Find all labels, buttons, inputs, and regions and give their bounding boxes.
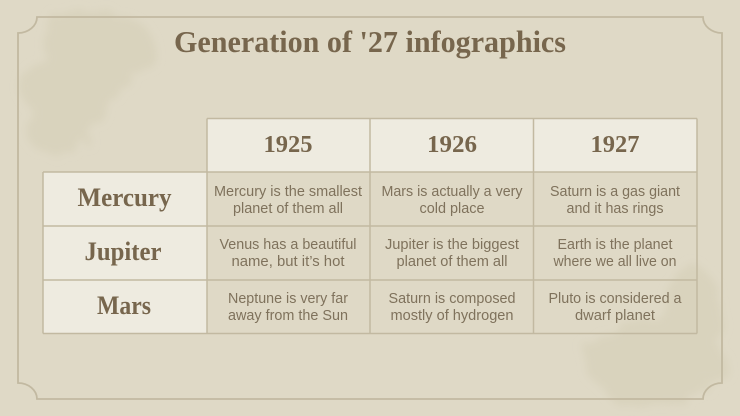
header row background [207,118,697,172]
cell: Jupiter 1926 [385,237,519,270]
cell: Mars 1926 [388,291,516,324]
column header: 1925: 1925 [264,132,312,158]
cell: Mars 1927: Pluto is considered a [548,291,682,307]
cell: Mercury 1926 [382,184,523,217]
cell: Mars 1926: Saturn is composed [388,291,516,307]
cell: Mars 1927: dwarf planet [575,308,655,324]
watercolor stain: bottom right [585,268,725,408]
cell: Mercury 1925: Mercury is the smallest [214,184,362,200]
cell: Jupiter 1926: planet of them all [396,254,508,270]
row label: Mars: Mars [97,291,151,320]
cell: Mars 1926: mostly of hydrogen [390,308,514,324]
cell: Mars 1927 [548,291,682,324]
table grid [43,118,697,334]
cell: Mars 1925: Neptune is very far [228,291,348,307]
cell: Mercury 1926: Mars is actually a very [382,184,523,200]
column header: 1927: 1927 [590,132,640,158]
cell: Mercury 1927 [550,184,680,217]
table [43,118,697,334]
cell: Jupiter 1927 [553,237,676,270]
row label background [43,172,207,333]
cell: Mercury 1927: and it has rings [566,201,664,217]
cell: Jupiter 1927: Earth is the planet [558,237,672,253]
cell: Mercury 1926: cold place [420,201,484,217]
title: Generation of '27 infographics [174,24,566,59]
cell: Jupiter 1927: where we all live on [553,254,676,270]
column header: 1926: 1926 [427,132,477,158]
cell: Mercury 1925: planet of them all [233,201,343,217]
watercolor stain: top left [20,10,156,157]
row label: Jupiter: Jupiter [84,237,162,266]
cell: Mars 1925 [228,291,348,324]
cell: Jupiter 1925: name, but it’s hot [232,254,344,270]
cell: Jupiter 1925 [220,237,356,270]
cell: Mercury 1927: Saturn is a gas giant [550,184,680,200]
row label: Mercury: Mercury [78,183,172,212]
cell: Jupiter 1926: Jupiter is the biggest [385,237,519,253]
cell: Mercury 1925 [214,184,362,217]
cell: Jupiter 1925: Venus has a beautiful [220,237,356,253]
cell: Mars 1925: away from the Sun [228,308,348,324]
